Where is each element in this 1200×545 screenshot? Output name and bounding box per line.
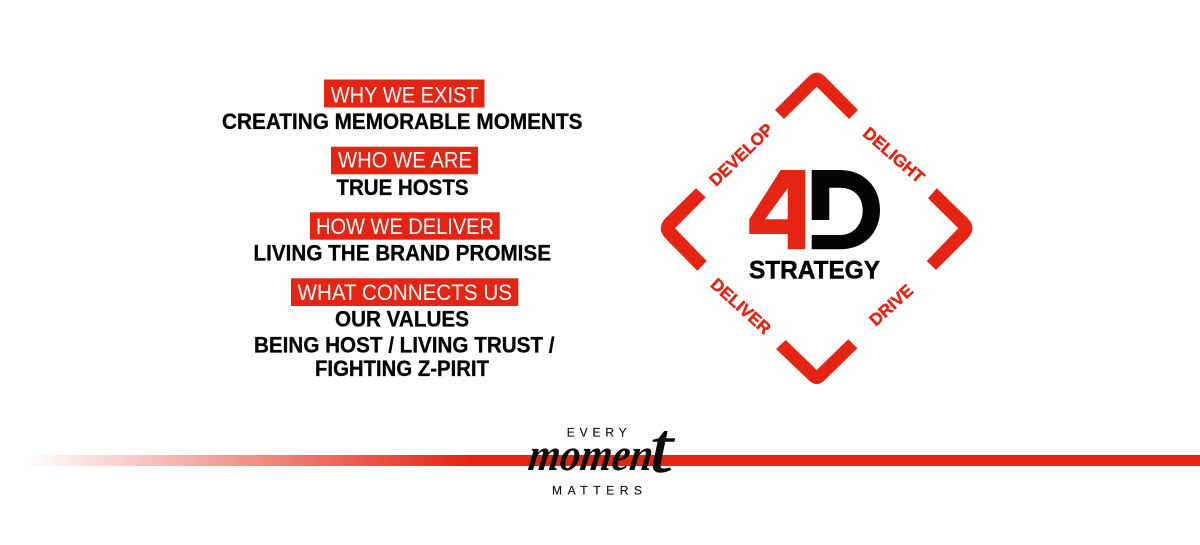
every moment matters tagline (526, 408, 675, 498)
what connects us heading: WHAT CONNECTS US (298, 280, 512, 305)
matters: MATTERS (552, 484, 642, 498)
logo numeral 4 (749, 170, 805, 249)
gradient rule (25, 455, 1200, 466)
moment (526, 408, 675, 488)
strategy wordmark: STRATEGY (749, 256, 880, 284)
chevron right (927, 188, 972, 270)
label deliver: DELIVER (707, 275, 775, 338)
chevron bottom (776, 339, 857, 384)
chevron top (775, 73, 858, 119)
moment: momen (526, 429, 657, 480)
our values text: OUR VALUES (335, 307, 469, 332)
left text column (222, 80, 582, 381)
label drive: DRIVE (866, 281, 917, 330)
chevron left (661, 188, 707, 271)
who we are heading: WHO WE ARE (338, 148, 472, 173)
4D strategy diamond (661, 73, 972, 384)
true hosts text: TRUE HOSTS (336, 175, 468, 200)
label develop: DEVELOP (706, 120, 777, 190)
values list line two: FIGHTING Z-PIRIT (315, 356, 490, 381)
creating memorable moments text: CREATING MEMORABLE MOMENTS (222, 109, 582, 134)
logo letter D (812, 170, 880, 249)
label delight: DELIGHT (859, 124, 929, 188)
living the brand promise text: LIVING THE BRAND PROMISE (254, 241, 551, 266)
why we exist heading: WHY WE EXIST (331, 82, 479, 107)
values list line one: BEING HOST / LIVING TRUST / (254, 332, 554, 357)
moment: t (649, 408, 675, 488)
how we deliver heading: HOW WE DELIVER (316, 214, 494, 239)
every: EVERY (567, 426, 627, 440)
